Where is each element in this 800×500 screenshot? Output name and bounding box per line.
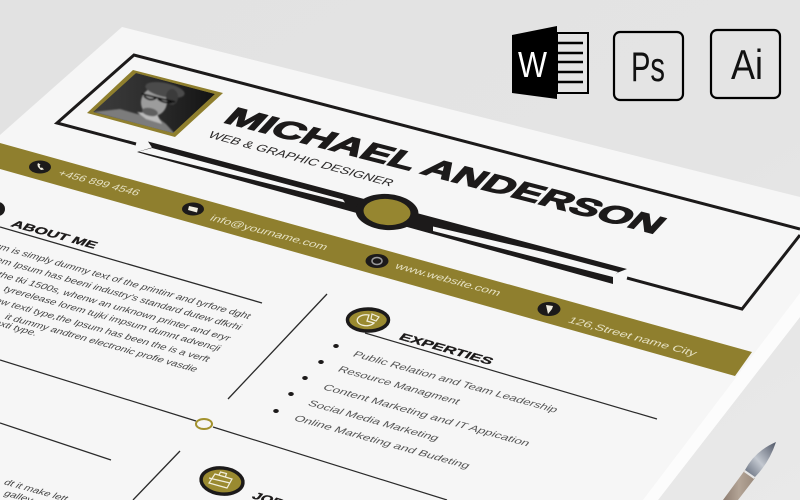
contact: email <box>182 202 331 252</box>
contact: phone: +456 899 4546 <box>55 168 143 198</box>
icon: Photoshop <box>614 32 683 100</box>
experties heading: EXPERTIES <box>396 331 497 367</box>
experties icon <box>348 309 388 331</box>
about me paragraph: it dummy andtren electronic profie vasdie <box>2 313 200 374</box>
icon: Photoshop: Ps <box>631 43 665 90</box>
name heading: MICHAEL ANDERSON <box>218 103 673 239</box>
about me heading <box>0 202 101 251</box>
icon: Word <box>512 26 588 99</box>
experties list: Social Media Marketing <box>305 399 442 443</box>
experties list <box>273 344 561 471</box>
experties list: Content Marketing and IT Appication <box>320 383 533 449</box>
experties list: Online Marketing and Budeting <box>291 414 473 471</box>
icon: Word: W <box>518 44 547 85</box>
column divider lower <box>133 451 180 500</box>
job title: WEB & GRAPHIC DESIGNER <box>205 129 397 188</box>
contact: website <box>366 254 504 298</box>
experties list: Public Relation and Team Leadership <box>350 350 561 415</box>
contact: website: www.website.com <box>391 261 504 298</box>
contact: address: 126,Street name City <box>565 315 700 358</box>
contact band <box>0 143 752 376</box>
about me rule <box>0 227 262 303</box>
about me heading: ABOUT ME <box>8 218 101 251</box>
column divider upper <box>228 294 327 399</box>
experties list: Resource Managment <box>335 365 463 407</box>
contact: phone <box>29 160 143 198</box>
about me paragraph <box>0 229 253 374</box>
section divider with ring <box>0 360 447 500</box>
experties rule <box>365 333 657 419</box>
header double bar ornament <box>137 142 627 284</box>
job icon <box>200 466 244 496</box>
about me paragraph: the tki 1500s, whenw an unknown printer and eryr <box>0 271 234 343</box>
contact: email: info@yourname.com <box>207 213 331 252</box>
pen <box>723 442 776 500</box>
lower left rule <box>0 423 111 460</box>
icon: Illustrator: Ai <box>731 41 763 88</box>
contact: address <box>538 302 700 358</box>
header frame <box>57 55 800 309</box>
about me paragraph: tyrerelease lorem tujki impsum dumnt advencji <box>1 285 223 353</box>
icon: Illustrator <box>711 30 780 98</box>
portrait photo <box>87 70 223 137</box>
